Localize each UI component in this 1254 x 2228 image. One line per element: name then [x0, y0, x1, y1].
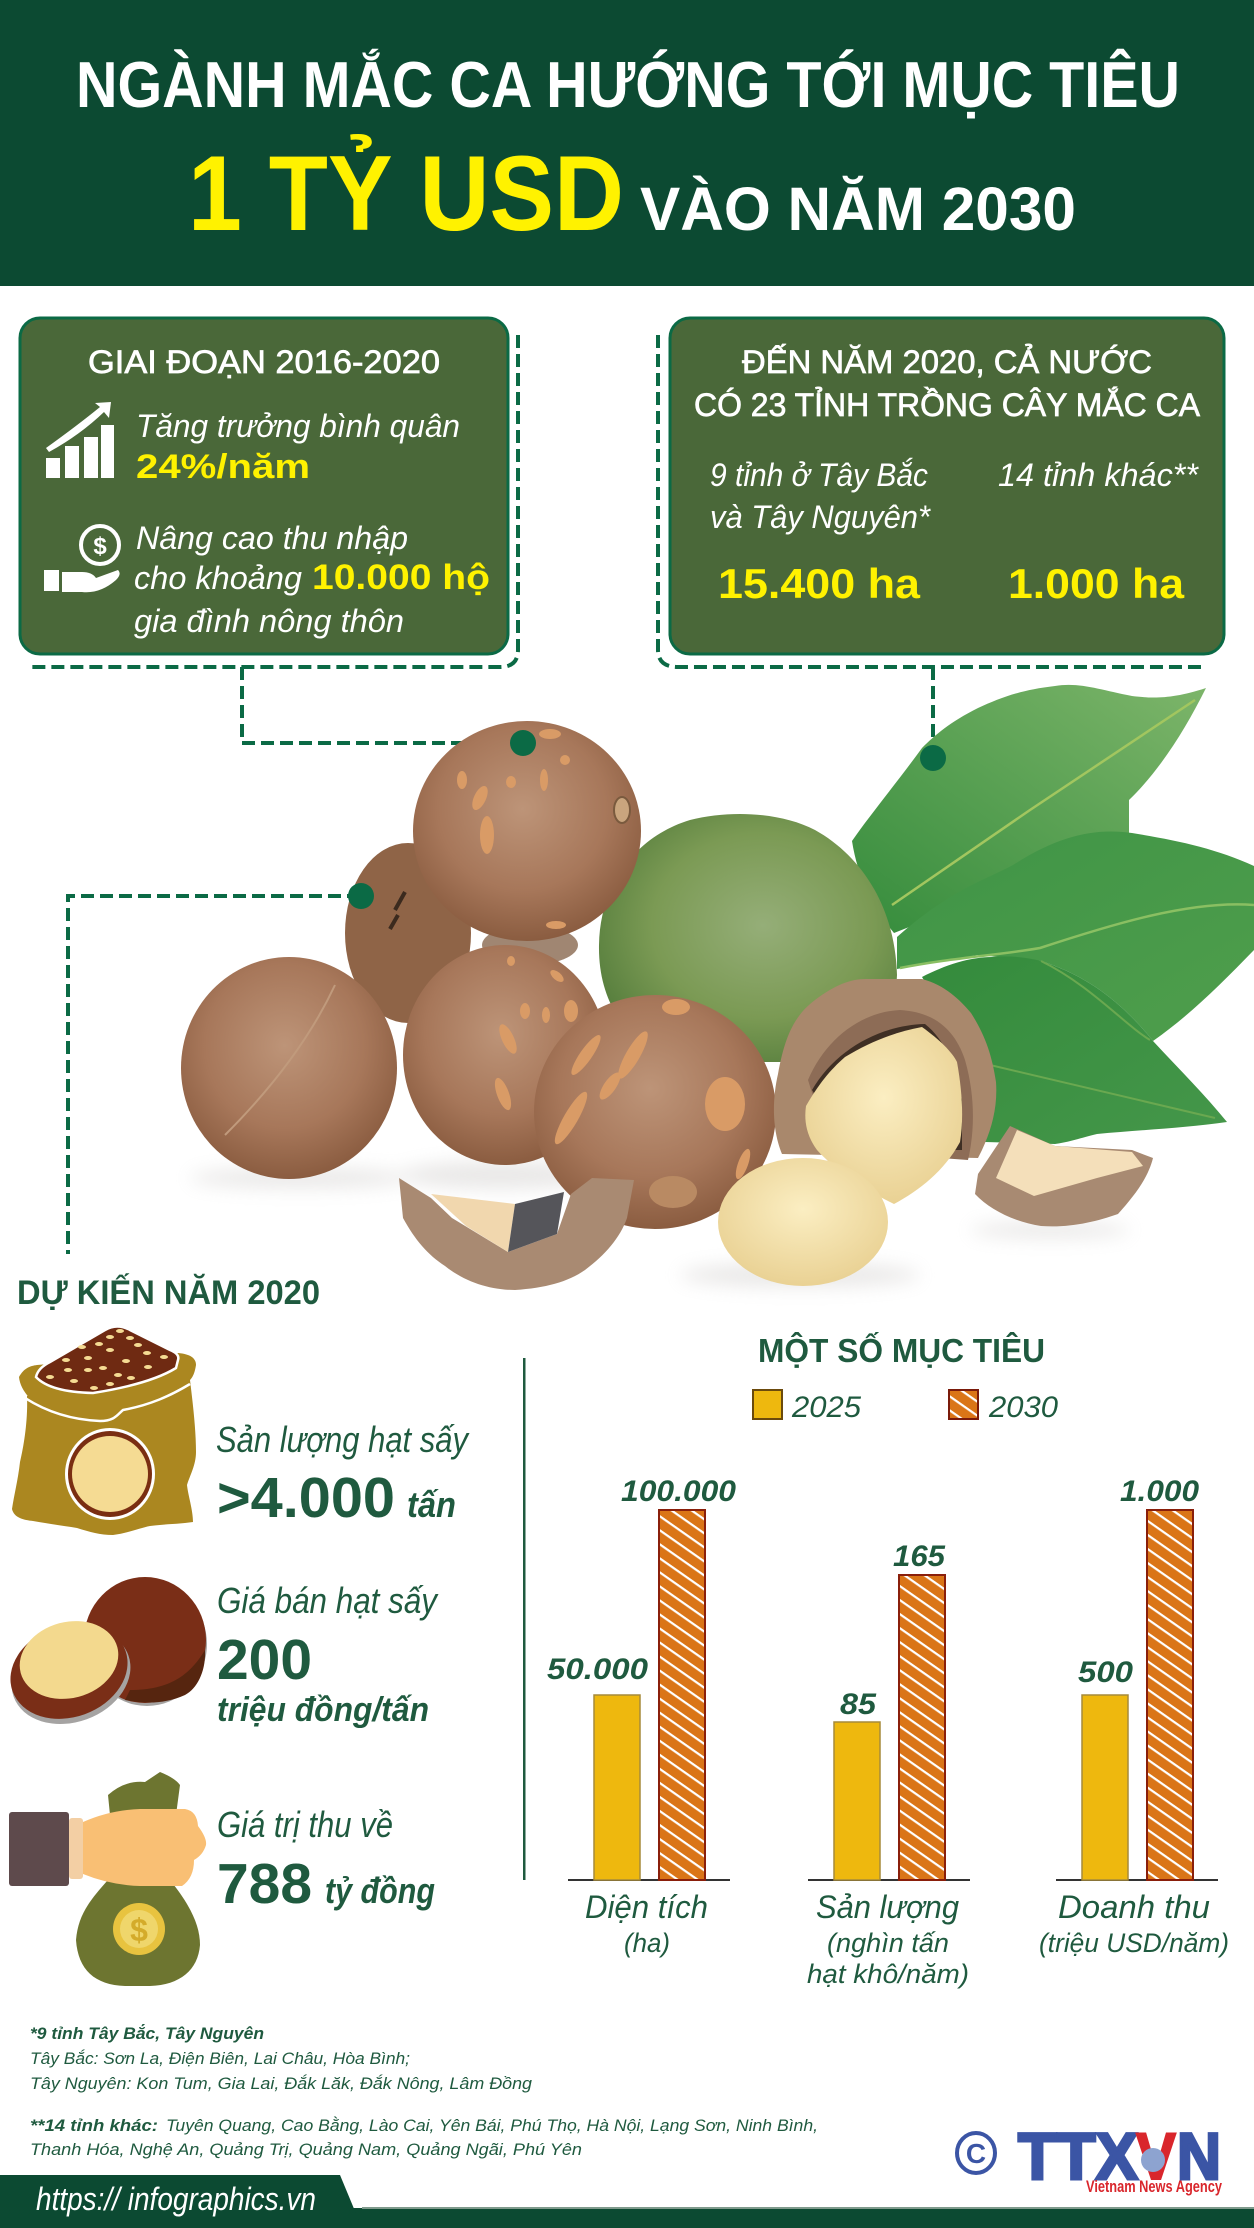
stat: production value: >4.000: [217, 1466, 395, 1530]
legend: 2025: [753, 1390, 861, 1424]
marker dot: back nut: [348, 883, 374, 909]
group: area: (ha): [624, 1928, 670, 1958]
chart: targets: [547, 1331, 1229, 1989]
shell: bottom right: [975, 1126, 1153, 1226]
logo: TTXVN: V: [1136, 2119, 1176, 2193]
households value: 10.000 hộ: [312, 558, 490, 597]
nut: green: [599, 814, 897, 1062]
nut: top: [413, 721, 641, 941]
connector: left panel to nut: [28, 335, 523, 743]
region 1 label line 2: và Tây Nguyên*: [710, 499, 931, 535]
ground shadow: [190, 1161, 1130, 1287]
logo: TTXVN: [957, 2119, 1222, 2196]
nut: left: [181, 957, 397, 1179]
leaf: lower: [922, 956, 1227, 1144]
icon: hand with money bag: $: [130, 1912, 148, 1948]
footnotes: Tây Bắc: Sơn La, Điện Biên, Lai Châu, Hòa Bình;: [30, 2049, 410, 2068]
growth text: Tăng trưởng bình quân: [136, 408, 460, 444]
stat: value number: 788: [217, 1852, 312, 1916]
group: output: [807, 1540, 970, 1989]
stat: production unit: tấn: [407, 1484, 456, 1525]
heading: forecast 2020: DỰ KIẾN NĂM 2020: [17, 1274, 320, 1312]
footnotes: Tây Nguyên: Kon Tum, Gia Lai, Đắk Lăk, Đắk Nông, Lâm Đồng: [30, 2074, 533, 2093]
nut: middle: [403, 945, 607, 1165]
panel: 23 provinces: [670, 318, 1224, 654]
stat: price value: 200: [217, 1628, 312, 1692]
income line 2: cho khoảng: [134, 560, 302, 596]
group: revenue: (triệu USD/năm): [1039, 1928, 1229, 1958]
group: revenue: 1.000: [1120, 1475, 1199, 1508]
region 2 label: 14 tỉnh khác**: [998, 457, 1200, 493]
title highlight: 1 TỶ USD: [188, 133, 624, 253]
footnotes: [30, 2024, 818, 2159]
income line 3: gia đình nông thôn: [134, 603, 404, 639]
icon: hand with coin: [44, 526, 120, 592]
header band: [0, 0, 1254, 286]
icon: cracked nut: [0, 1577, 207, 1740]
photo: macadamia nuts and leaves: [181, 685, 1254, 1290]
panel: 2016-2020: [20, 318, 508, 654]
connector: nut to forecast: [68, 896, 360, 1254]
footer url: https:// infographics.vn: [36, 2181, 316, 2217]
growth value: 24%/năm: [136, 448, 310, 486]
nut: front: [534, 995, 776, 1229]
region 2 value: 1.000 ha: [1008, 560, 1185, 607]
connector: right panel to leaf: [658, 335, 1204, 758]
nut: opened shell: [774, 979, 996, 1158]
icon: growth chart: [46, 402, 114, 478]
group: area: [547, 1475, 736, 1958]
region 1 value: 15.400 ha: [718, 560, 921, 607]
legend: 2030: [949, 1390, 1058, 1424]
group: revenue: [1039, 1475, 1229, 1958]
stat: value label: Giá trị thu về: [217, 1804, 393, 1845]
group: area: Diện tích: [585, 1889, 708, 1925]
marker dot: top nut: [510, 730, 536, 756]
group: output: Sản lượng: [816, 1889, 959, 1925]
region 1 label: 9 tỉnh ở Tây Bắc: [710, 457, 928, 493]
logo: TTXVN: C: [966, 2138, 986, 2169]
stat: production label: Sản lượng hạt sấy: [216, 1419, 470, 1460]
logo: TTXVN: N: [1177, 2119, 1221, 2193]
legend: 2025: 2025: [791, 1391, 861, 1424]
panel heading line 2: CÓ 23 TỈNH TRỒNG CÂY MẮC CA: [694, 387, 1201, 423]
stat: price label: Giá bán hạt sấy: [217, 1580, 439, 1621]
income text: Nâng cao thu nhập: [136, 520, 408, 556]
nut: back left: [345, 843, 471, 1023]
group: area: 100.000: [621, 1475, 736, 1508]
footnotes: **14 tỉnh khác:: [30, 2116, 158, 2135]
kernel: loose: [718, 1158, 888, 1286]
marker dot: leaf: [920, 745, 946, 771]
shell: bottom left: [399, 1178, 634, 1290]
icon: sack: [12, 1326, 196, 1535]
group: revenue: 500: [1078, 1656, 1133, 1689]
panel heading: ĐẾN NĂM 2020, CẢ NƯỚC: [742, 344, 1152, 380]
panel heading: GIAI ĐOẠN 2016-2020: [88, 344, 440, 380]
logo: TTXVN: TTX: [1018, 2119, 1138, 2193]
title line 2: VÀO NĂM 2030: [640, 175, 1076, 243]
group: area: 50.000: [547, 1653, 648, 1686]
chart heading: MỘT SỐ MỤC TIÊU: [758, 1331, 1045, 1369]
group: output: (nghìn tấn: [827, 1928, 949, 1958]
footnotes: Tuyên Quang, Cao Bằng, Lào Cai, Yên Bái, Phú Thọ, Hà Nội, Lạng Sơn, Ninh Bình,: [166, 2116, 818, 2135]
icon: hand with money bag: [9, 1772, 206, 1986]
leaf: right: [897, 832, 1254, 1041]
icon: hand with coin: $: [93, 533, 107, 560]
group: output: hạt khô/năm): [807, 1959, 969, 1989]
group: revenue: Doanh thu: [1058, 1889, 1210, 1925]
stat: price unit: triệu đồng/tấn: [217, 1691, 429, 1729]
stat: value unit: tỷ đồng: [325, 1870, 435, 1911]
leaf: top: [852, 685, 1206, 933]
footnotes: *9 tỉnh Tây Bắc, Tây Nguyên: [30, 2024, 264, 2043]
group: output: 165: [893, 1540, 946, 1573]
kernel: in shell: [805, 1027, 962, 1204]
legend: 2030: 2030: [988, 1391, 1058, 1424]
section divider: [523, 1358, 526, 1880]
group: output: 85: [840, 1688, 877, 1721]
footnotes: Thanh Hóa, Nghệ An, Quảng Trị, Quảng Nam, Quảng Ngãi, Phú Yên: [30, 2140, 582, 2159]
footer band: [0, 2175, 1254, 2228]
